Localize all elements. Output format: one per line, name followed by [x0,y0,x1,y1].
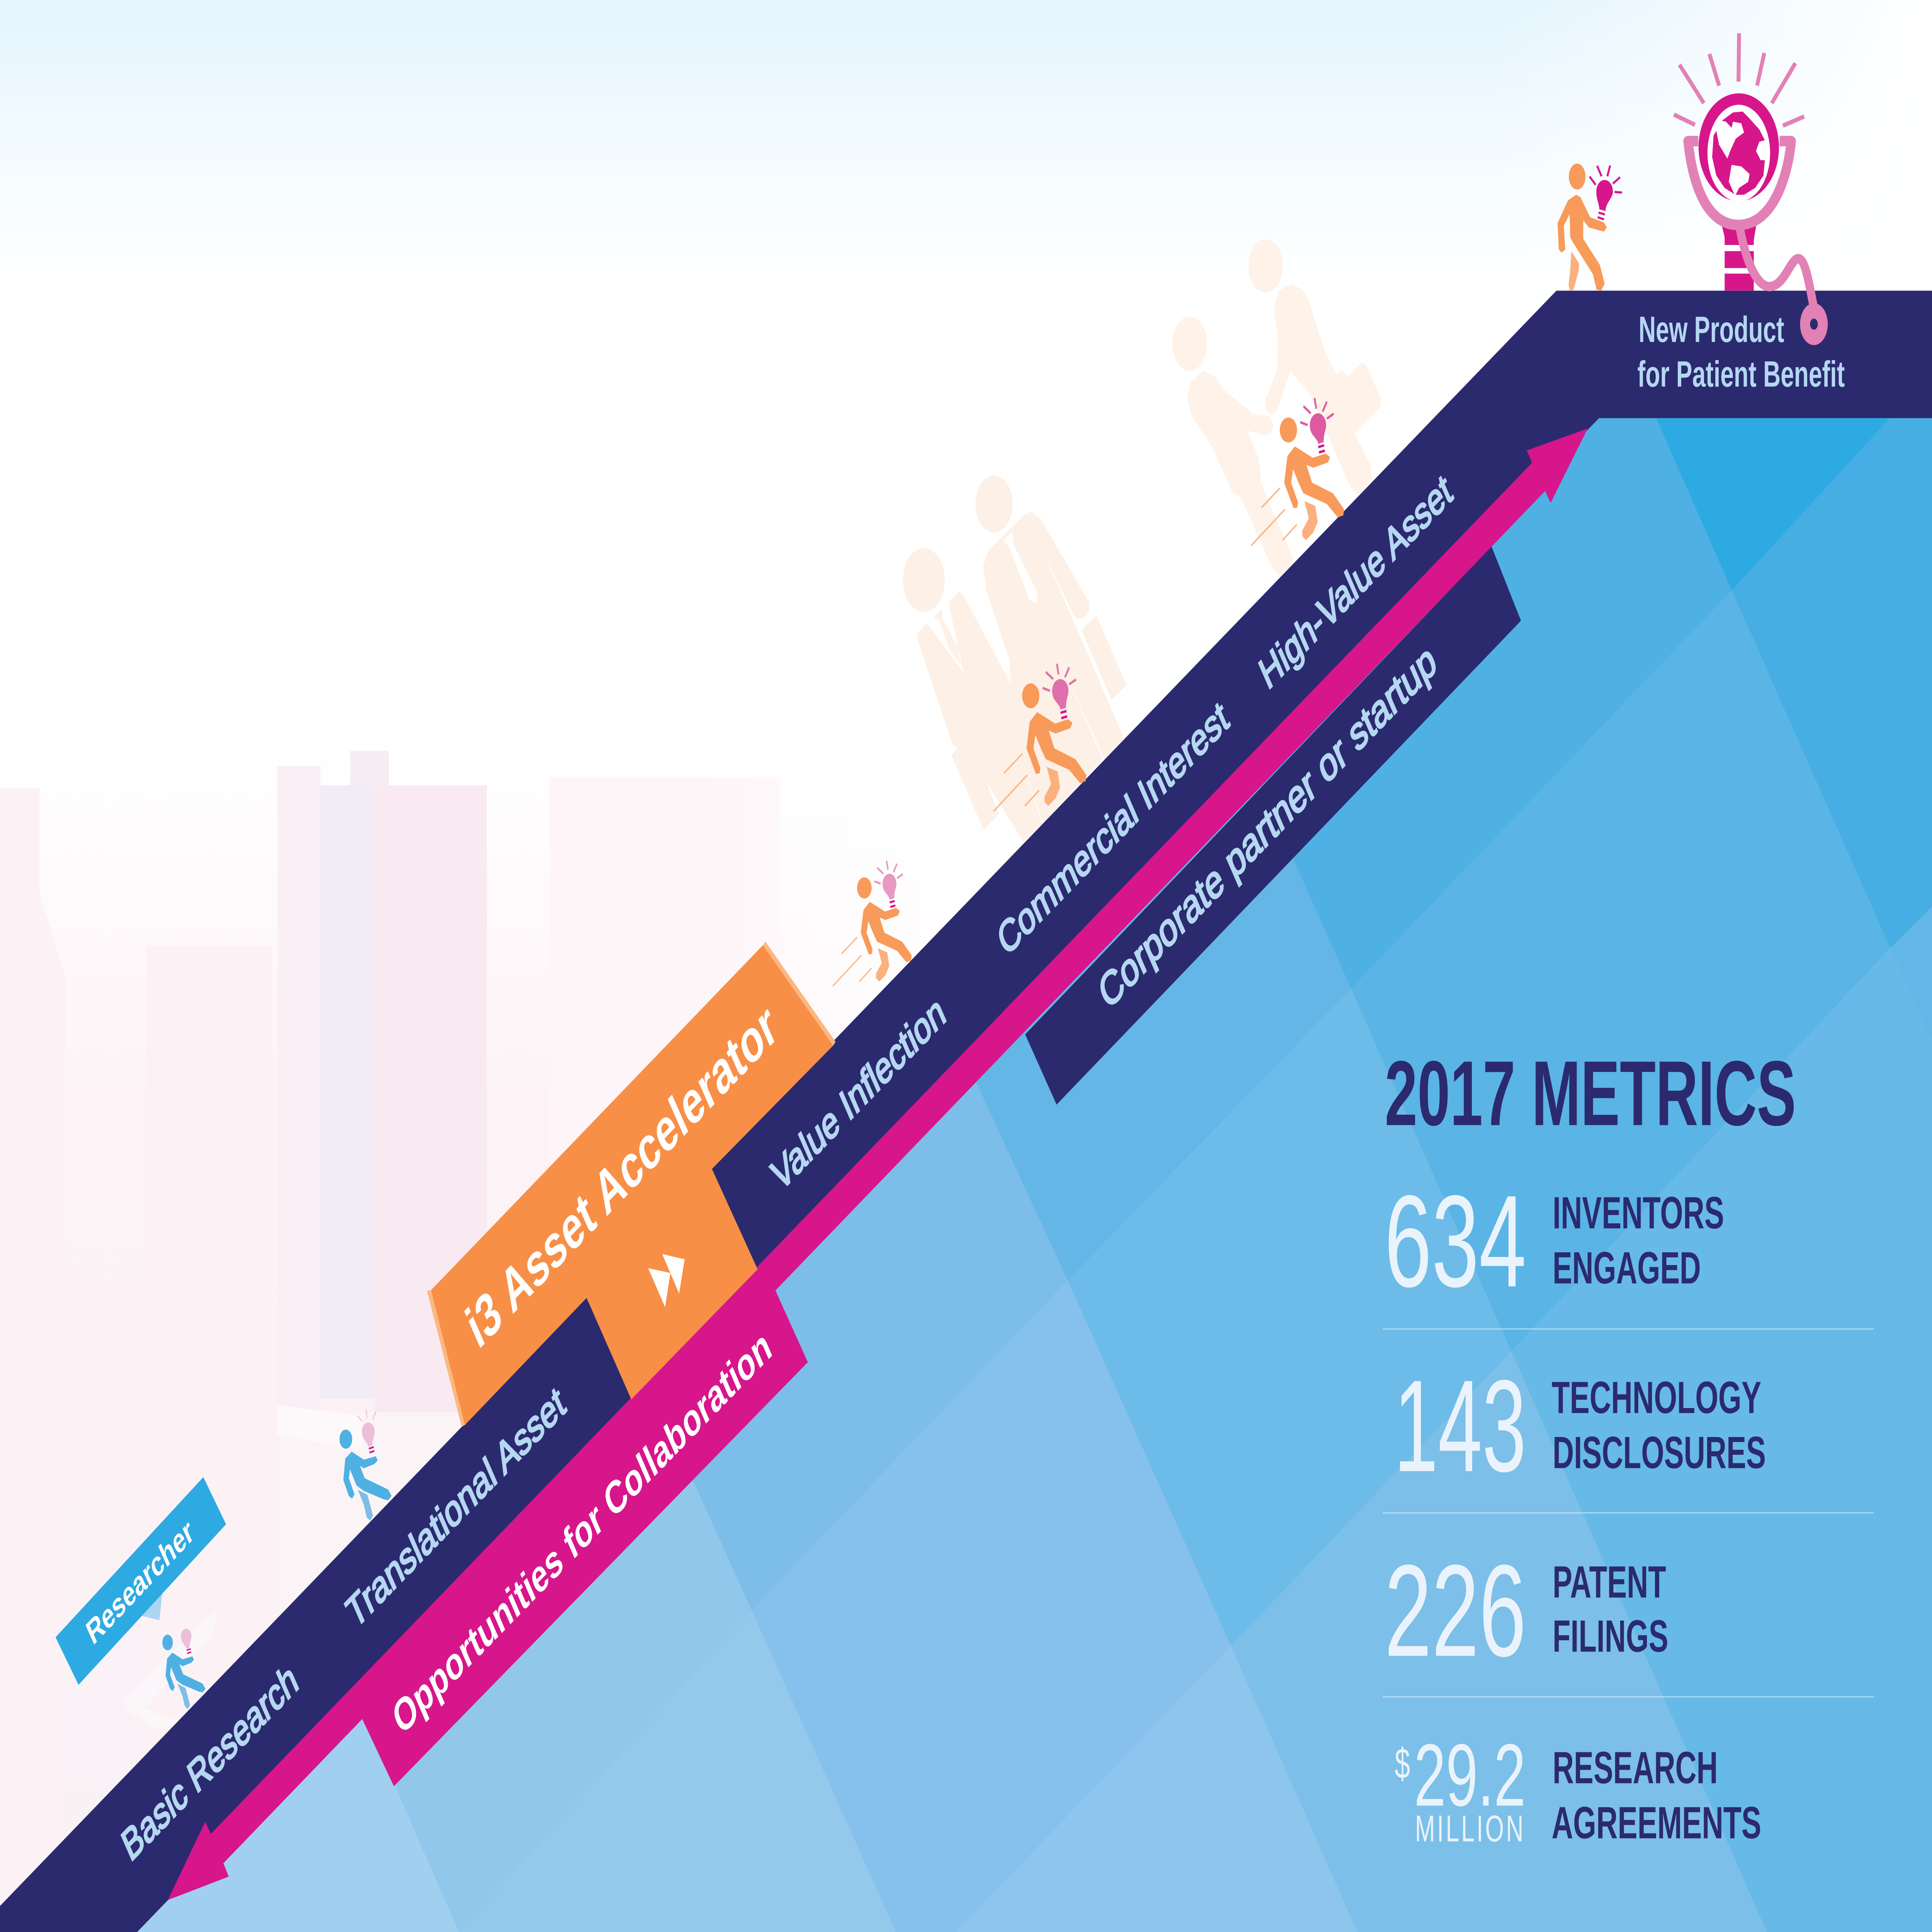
ghost figures: handshake [1172,239,1381,578]
metric: research agreements: MILLION [1415,1808,1524,1850]
orange runner: high-value asset [1251,398,1344,546]
metric: inventors engaged: INVENTORS [1553,1187,1724,1238]
corporate partner tag: Corporate partner or startup [1092,633,1442,1019]
researcher tag [56,1477,226,1685]
icon: globe light bulb with stethoscope [1674,33,1828,345]
orange runner: commercial interest [993,664,1087,811]
left suited man [903,548,1042,842]
metric: patent filings: FILINGS [1553,1611,1668,1662]
metric: research agreements [1395,1725,1761,1850]
metric: patent filings: PATENT [1553,1556,1666,1607]
right suited man [975,476,1127,823]
label: commercial interest: Commercial Interest [992,691,1234,965]
right handshake man with briefcase [1248,239,1381,495]
label: value inflection: Value Inflection [766,986,951,1200]
corporate partner tag [1025,546,1521,1105]
ghost figures: suited men with briefcases [903,476,1127,842]
metrics panel [1383,1042,1874,1850]
metric: technology disclosures: TECHNOLOGY [1552,1372,1761,1423]
icon: light rays [1674,33,1804,126]
faded city skyline [0,743,1039,1932]
label: translational asset: Translational Asset [340,1377,571,1638]
new product caption: for Patient Benefit [1638,354,1845,395]
metrics heading: 2017 METRICS [1385,1042,1796,1145]
left handshake man [1172,317,1293,578]
metric: research agreements: $ [1395,1740,1410,1787]
new product caption: New Product [1639,309,1784,350]
orange figure walking with idea [1558,163,1622,291]
metric: inventors engaged [1384,1168,1724,1315]
metric: inventors engaged: 634 [1384,1168,1526,1315]
i3 asset accelerator panel [427,942,835,1427]
blue figure: translational stage [339,1409,391,1521]
label: basic research: Basic Research [116,1654,303,1871]
researcher tag: Researcher [82,1512,198,1652]
metric: technology disclosures: 143 [1394,1353,1526,1499]
metric: research agreements: 29.2 [1414,1725,1526,1825]
icon: stethoscope [1688,141,1813,305]
orange runner: value inflection [833,861,912,986]
icon: fast-forward arrows [648,1254,685,1307]
bulb base [1721,223,1757,291]
band stage labels [116,464,1458,1871]
metric: inventors engaged: ENGAGED [1553,1242,1701,1293]
metric: patent filings: 226 [1384,1537,1526,1684]
magenta two-way arrow with opportunities tag: Opportunities for Collaboration [386,1320,777,1745]
metric: technology disclosures [1394,1353,1766,1499]
i3 asset accelerator panel: i3 Asset Accelerator [458,990,785,1361]
metric: research agreements: AGREEMENTS [1552,1797,1761,1848]
blue figure: researcher with idea [162,1629,206,1709]
metric: research agreements: RESEARCH [1553,1742,1718,1793]
metric: technology disclosures: DISCLOSURES [1553,1427,1766,1478]
icon: globe [1699,94,1779,202]
new product caption [1638,309,1845,395]
metric: patent filings [1384,1537,1668,1684]
faceted blue background [137,409,1932,1932]
label: high-value asset: High-Value Asset [1253,464,1458,699]
